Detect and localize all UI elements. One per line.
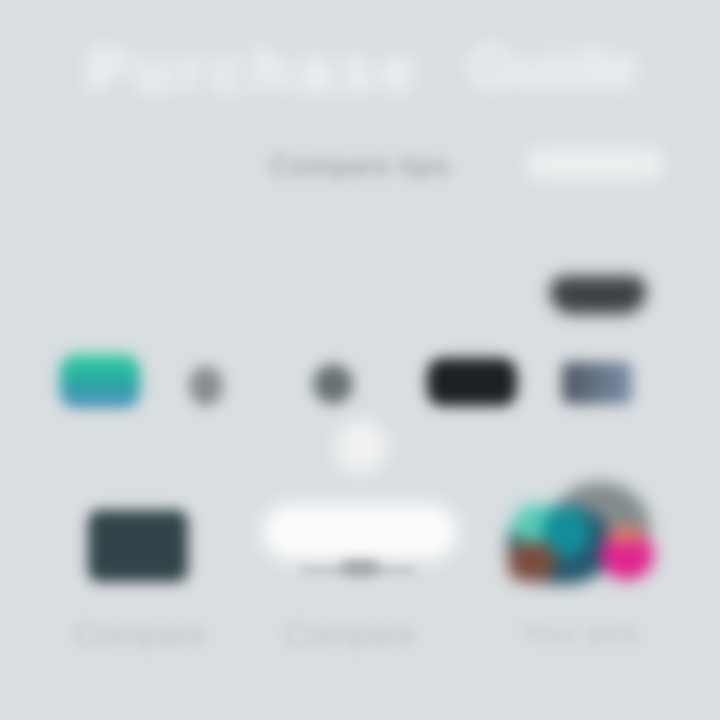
caption left: Compare [74,616,206,652]
subtitle highlight [526,148,664,180]
card detail line [300,567,416,573]
icon: teal button [60,354,140,408]
dark lower circle [508,506,612,584]
teal segment [542,506,590,558]
title: first word: Purchase [86,34,422,106]
brown left segment [508,542,556,582]
light teal segment [512,504,562,546]
magenta segment [600,530,654,580]
card detail mark [342,561,378,575]
caption right: Your pick [520,618,638,650]
orange accent [606,526,644,544]
panel: dark tablet [88,510,188,582]
caption centre: Compare [284,616,416,652]
icon: small grey dot left [189,366,223,406]
icon: dark device top right [550,276,646,314]
title: second word: Guide [468,34,638,101]
panel: white card [262,504,458,560]
icon: blue grey card [562,362,632,404]
colour wheel cluster [496,472,666,597]
subtitle: Compare tips [270,150,449,181]
grey back circle [550,482,650,572]
icon: small grey dot centre [313,364,353,404]
icon: white circle [334,420,388,474]
icon: dark button [427,358,517,406]
